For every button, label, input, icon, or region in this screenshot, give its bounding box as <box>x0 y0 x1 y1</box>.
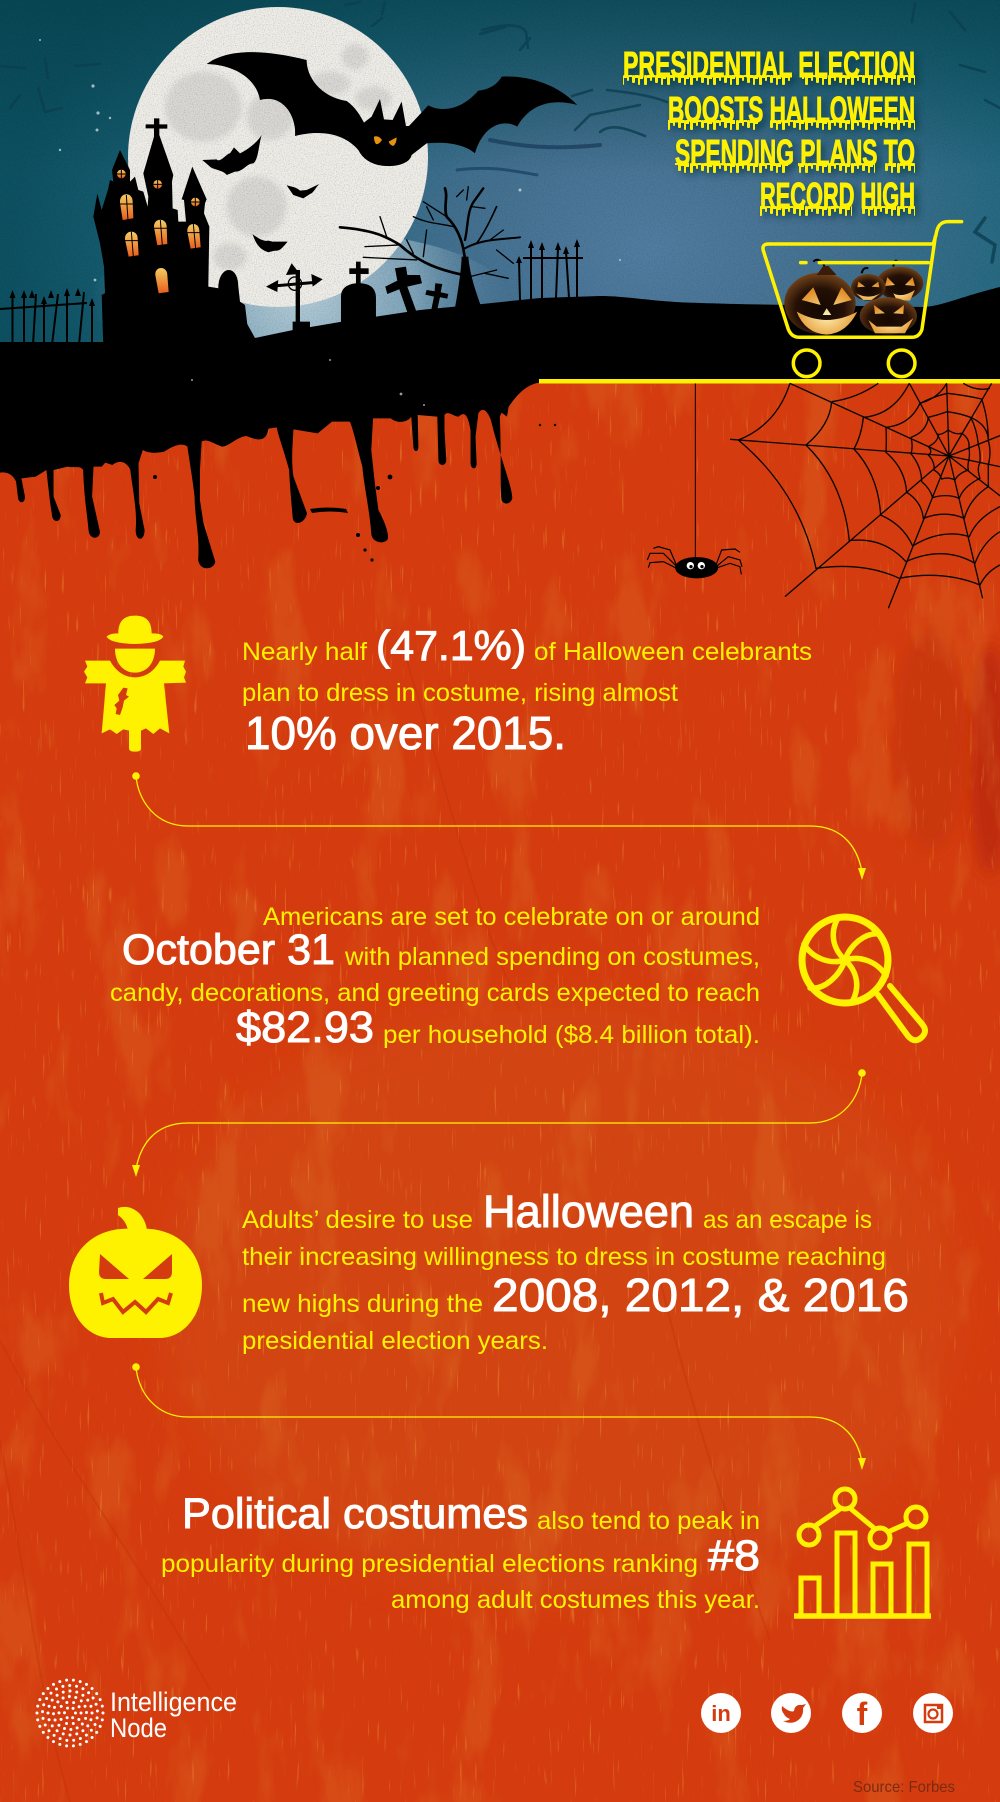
left fence <box>0 288 95 345</box>
tombstone <box>341 262 376 327</box>
icon: facebook: f <box>857 1696 868 1732</box>
stat: Political costumes: Political costumes <box>182 1490 528 1538</box>
spider <box>647 383 742 578</box>
connector arrow 3 <box>132 1363 866 1470</box>
yellow shelf line <box>539 379 1000 384</box>
stat: $82.93: $82.93 <box>236 1003 374 1052</box>
connector arrow 2 <box>132 1069 866 1177</box>
title: PRESIDENTIAL ELECTION <box>623 45 915 85</box>
stat: 10% over 2015: 10% over 2015. <box>245 707 566 759</box>
text: political costumes: also tend to peak in <box>537 1507 760 1535</box>
sky stars <box>39 39 621 281</box>
ground and dripping silhouette <box>0 287 1000 568</box>
stat: October 31: October 31 <box>122 926 335 974</box>
social icons <box>701 1693 953 1733</box>
text: election years: new highs during the <box>242 1290 483 1318</box>
text: October 31 spending: Americans are set to celebrate on or around <box>263 903 760 931</box>
stat: 2008, 2012, and 2016: 2008, 2012, & 2016 <box>492 1269 909 1321</box>
big bat <box>207 52 577 166</box>
night sky <box>0 0 1000 382</box>
right fence <box>516 239 583 300</box>
text: election years: Adults’ desire to use <box>242 1206 473 1234</box>
text: October 31 spending: per household ($8.4 billion total). <box>383 1021 760 1049</box>
logo wordmark: Node <box>110 1713 167 1743</box>
title: SPENDING PLANS TO <box>675 133 915 173</box>
spider web <box>730 383 1000 608</box>
title: BOOSTS HALLOWEEN <box>668 90 915 130</box>
castle <box>93 118 250 347</box>
icon: pumpkin <box>69 1207 202 1338</box>
text: election years: their increasing willingness to dress in costume reaching <box>242 1243 886 1271</box>
title: RECORD HIGH <box>760 176 915 216</box>
logo mark <box>37 1680 103 1746</box>
icon: linkedin <box>701 1693 741 1733</box>
pumpkins <box>784 260 923 335</box>
shopping cart with pumpkins <box>763 222 962 377</box>
leaning cross <box>385 267 422 315</box>
text: election years: as an escape is <box>703 1206 872 1234</box>
castle windows <box>117 170 201 293</box>
text: costume share: Nearly half <box>242 638 367 666</box>
stat: Halloween: Halloween <box>483 1186 694 1237</box>
text: October 31 spending: with planned spending on costumes, <box>344 943 760 971</box>
text: election years: presidential election years. <box>242 1327 548 1355</box>
text: political costumes <box>161 1490 760 1614</box>
connector arrow 1 <box>132 772 866 880</box>
celtic cross <box>266 263 323 333</box>
icon: scarecrow <box>84 616 186 752</box>
icon: lollipop <box>802 917 925 1040</box>
small cross <box>425 283 448 313</box>
text: costume share: of Halloween celebrants <box>534 638 812 666</box>
logo wordmark: Intelligence <box>110 1687 237 1717</box>
icon: bar and line chart <box>794 1489 931 1616</box>
sky cracks <box>0 2 1000 262</box>
text: costume share <box>242 622 812 759</box>
text: October 31 spending <box>110 903 760 1052</box>
stat: number 8: #8 <box>708 1532 760 1580</box>
cart frame <box>763 222 962 377</box>
icon: instagram <box>913 1693 953 1733</box>
title <box>623 45 915 216</box>
small bats <box>202 135 319 252</box>
icon: twitter <box>771 1693 811 1733</box>
icon: facebook <box>842 1693 882 1733</box>
source: Source: Forbes <box>853 1779 955 1796</box>
stat: 47.1%: (47.1%) <box>376 622 526 669</box>
icon: linkedin: in <box>711 1701 731 1726</box>
text: election years <box>242 1186 909 1355</box>
logo wordmark <box>110 1687 237 1743</box>
text: October 31 spending: candy, decorations, and greeting cards expected to reach <box>110 979 760 1007</box>
graveyard tree <box>340 187 520 308</box>
moon <box>128 7 428 307</box>
text: costume share: plan to dress in costume, rising almost <box>242 679 678 707</box>
text: political costumes: popularity during presidential elections ranking <box>161 1550 698 1578</box>
text: political costumes: among adult costumes this year. <box>391 1586 760 1614</box>
graves <box>266 262 448 333</box>
